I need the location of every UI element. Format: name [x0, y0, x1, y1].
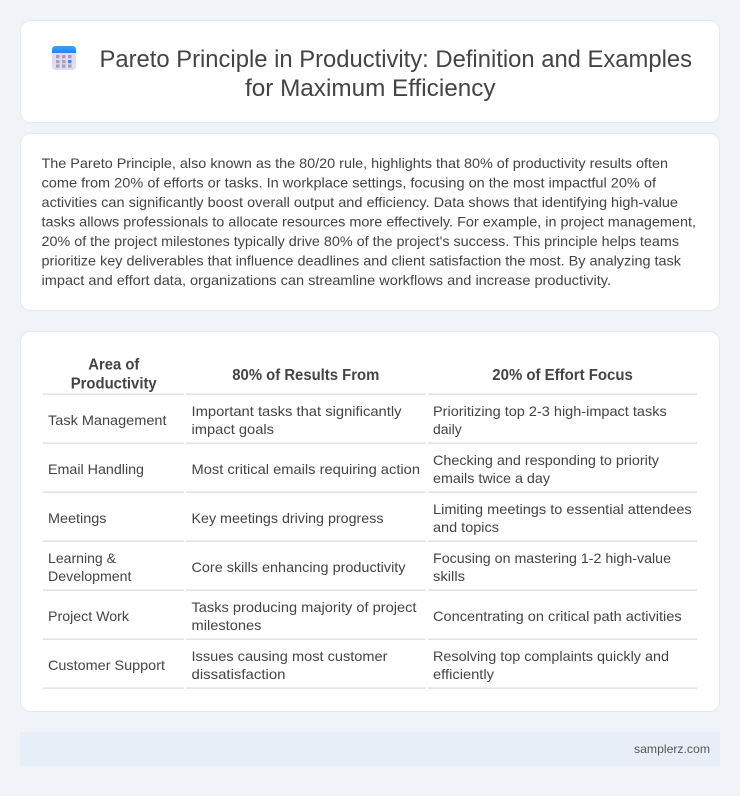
table header row: Productivity	[71, 376, 157, 392]
row: email handling: Checking and responding to priority	[433, 452, 659, 468]
row: customer support: Customer Support	[48, 657, 165, 673]
row: learning and development: skills	[433, 568, 465, 584]
footer	[20, 732, 720, 766]
row: learning and development: Core skills enhancing productivity	[192, 559, 406, 575]
text block: introduction: activities can significantly boost overall output and efficiency. Data shows that identifying high-value	[42, 194, 678, 210]
panel: introduction text	[20, 134, 720, 310]
row: learning and development: Development	[48, 568, 132, 584]
row: meetings: Meetings	[48, 510, 106, 526]
row: task management: daily	[433, 421, 462, 437]
row: project work: Tasks producing majority of project	[192, 599, 417, 615]
row: customer support: dissatisfaction	[192, 666, 286, 682]
row: learning and development: Focusing on mastering 1-2 high-value	[433, 550, 671, 566]
row: task management: Important tasks that significantly	[192, 403, 402, 419]
row: email handling: Most critical emails requiring action	[192, 461, 420, 477]
row: email handling	[48, 452, 659, 486]
row: customer support	[48, 648, 669, 682]
table header row: 80% of Results From	[232, 367, 379, 384]
text block: introduction	[42, 155, 696, 288]
icon: calendar	[52, 46, 76, 70]
row: email handling: emails twice a day	[433, 470, 550, 486]
row: meetings: and topics	[433, 519, 499, 535]
title: for Maximum Efficiency	[245, 75, 496, 102]
text block: introduction: tasks allows professionals to allocate resources more effectively. For example, in project management,	[42, 214, 696, 230]
table header row: 20% of Effort Focus	[492, 367, 633, 384]
row: email handling: Email Handling	[48, 461, 144, 477]
row: meetings: Limiting meetings to essential attendees	[433, 501, 692, 517]
row: task management: Prioritizing top 2-3 high-impact tasks	[433, 403, 667, 419]
row: project work: milestones	[192, 617, 262, 633]
panel: table	[20, 332, 720, 712]
row: customer support: Resolving top complaints quickly and	[433, 648, 669, 664]
row: meetings	[48, 501, 692, 535]
text block: introduction: come from 20% of efforts or tasks. In workplace settings, focusing on the most impactful 20% of	[42, 174, 656, 190]
row: learning and development: Learning &	[48, 550, 117, 566]
row: task management: impact goals	[192, 421, 274, 437]
row: customer support: Issues causing most customer	[192, 648, 388, 664]
row: task management: Task Management	[48, 412, 167, 428]
text block: introduction: 20% of the project milestones typically drive 80% of the project's success. This principle helps teams	[42, 233, 679, 249]
row: learning and development	[48, 550, 671, 584]
row: task management	[48, 403, 667, 437]
panel: header	[20, 20, 720, 122]
row: project work: Concentrating on critical path activities	[433, 608, 682, 624]
title	[100, 46, 692, 102]
text block: introduction: prioritize key deliverables that influence deadlines and client satisfaction the most. By analyzing task	[42, 252, 682, 268]
table header row	[71, 356, 633, 392]
row: project work	[48, 599, 682, 633]
row: project work: Project Work	[48, 608, 130, 624]
text block: introduction: impact and effort data, organizations can streamline workflows and increase productivity.	[42, 272, 611, 288]
row: meetings: Key meetings driving progress	[192, 510, 384, 526]
table header row: Area of	[88, 356, 140, 374]
row: customer support: efficiently	[433, 666, 494, 682]
footer: samplerz.com	[634, 742, 710, 756]
text block: introduction: The Pareto Principle, also known as the 80/20 rule, highlights that 80% of productivity results often	[42, 155, 668, 171]
title: Pareto Principle in Productivity: Definition and Examples	[100, 46, 692, 73]
